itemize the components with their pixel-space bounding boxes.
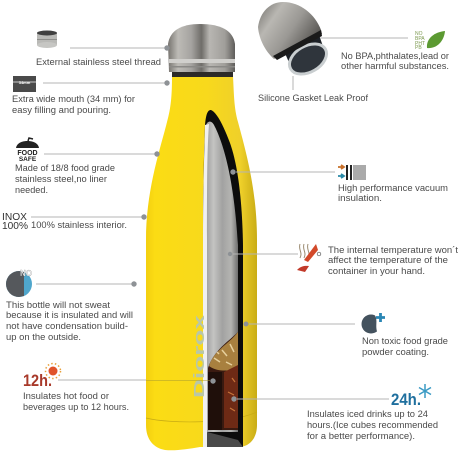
callout: no sweat — [6, 269, 137, 342]
panel: lid close-up — [258, 2, 332, 80]
callout: 12 hours: beverages up to 12 hours. — [23, 402, 129, 412]
callout: 24 hours: hours.(Ice cubes recommended — [307, 420, 438, 430]
callout: no BPA — [320, 31, 449, 71]
icon: 34mm mouth: 34mm — [19, 80, 31, 85]
callout: no BPA: No BPA,phthalates,lead or — [341, 51, 449, 61]
callout: gasket label: Silicone Gasket Leak Proof — [258, 93, 369, 103]
callout: 12 hours: Insulates hot food or — [23, 391, 109, 401]
icon: food safe: SAFE — [19, 156, 37, 163]
callout: temperature: container in your hand. — [328, 266, 425, 276]
callout: vacuum insulation: insulation. — [338, 193, 382, 203]
callout: food safe: Made of 18/8 food grade — [15, 163, 115, 173]
callout: food safe: stainless steel,no liner — [15, 174, 107, 184]
callout: gasket label — [258, 76, 369, 103]
callout: 100% stainless — [2, 212, 147, 232]
callout: 24 hours — [231, 384, 438, 441]
callout: temperature: The internal temperature won´t — [328, 245, 459, 255]
callout: no sweat: not have condensation build- — [6, 321, 128, 331]
callout: 12 hours — [23, 364, 216, 412]
icon: leaf: NO — [415, 31, 423, 37]
icon: leaf: PHT — [415, 41, 425, 47]
icon: 12h sun — [23, 364, 60, 390]
callout: 24 hours: Insulates iced drinks up to 24 — [307, 409, 428, 419]
drink contents — [208, 332, 238, 430]
lid plug — [281, 32, 326, 74]
lid steel shell — [258, 2, 322, 59]
bottle — [146, 24, 257, 450]
callout: wide mouth — [12, 76, 170, 115]
silicone gasket — [284, 38, 332, 80]
steel cap — [168, 24, 235, 77]
callout: wide mouth: easy filling and pouring. — [12, 105, 111, 115]
callout: powder coating: Non toxic food grade — [362, 336, 448, 346]
icon: leaf: PB — [415, 45, 422, 51]
callout: powder coating — [244, 313, 448, 357]
brand text: Diorox — [191, 314, 208, 398]
icon: thread — [37, 30, 57, 48]
icon: coating plus — [362, 313, 385, 334]
callout: food safe — [15, 138, 160, 195]
callout: 24 hours: for a better performance). — [307, 431, 415, 441]
callout: vacuum insulation — [230, 165, 448, 203]
icon: food safe: FOOD — [17, 150, 38, 157]
cutaway interior — [203, 110, 243, 447]
callout: external thread — [36, 30, 170, 67]
icon: hand heat — [297, 244, 321, 272]
icon: vacuum layers — [338, 165, 366, 180]
icon: leaf — [415, 31, 445, 51]
callout: wide mouth: Extra wide mouth (34 mm) for — [12, 94, 135, 104]
icon: 12h sun: 12h. — [23, 371, 52, 390]
callout: external thread: External stainless steel thread — [36, 57, 161, 67]
callout: vacuum insulation: High performance vacuum — [338, 183, 448, 193]
icon: 34mm mouth — [13, 76, 36, 92]
callout: no sweat: because it is insulated and will — [6, 310, 133, 320]
icon: 24h snowflake — [391, 384, 431, 409]
icon: 24h snowflake: 24h. — [391, 390, 421, 409]
callout: no sweat: up on the outside. — [6, 332, 81, 342]
callout: food safe: needed. — [15, 185, 48, 195]
icon: food safe — [16, 138, 39, 163]
icon: INOX 100%: INOX — [2, 212, 27, 223]
icon: no condensation: NO — [20, 269, 32, 278]
callout: temperature — [228, 244, 459, 276]
callout: powder coating: powder coating. — [362, 347, 429, 357]
icon: leaf: BPA — [415, 36, 425, 42]
callout: no sweat: This bottle will not sweat — [6, 300, 111, 310]
icon: INOX 100% — [2, 212, 28, 232]
callout: no BPA: other harmful substances. — [341, 61, 449, 71]
callout: temperature: affect the temperature of the — [328, 255, 448, 265]
callout: 100% stainless: 100% stainless interior. — [31, 220, 127, 230]
icon: INOX 100%: 100% — [2, 221, 28, 232]
bottle body — [146, 76, 257, 450]
